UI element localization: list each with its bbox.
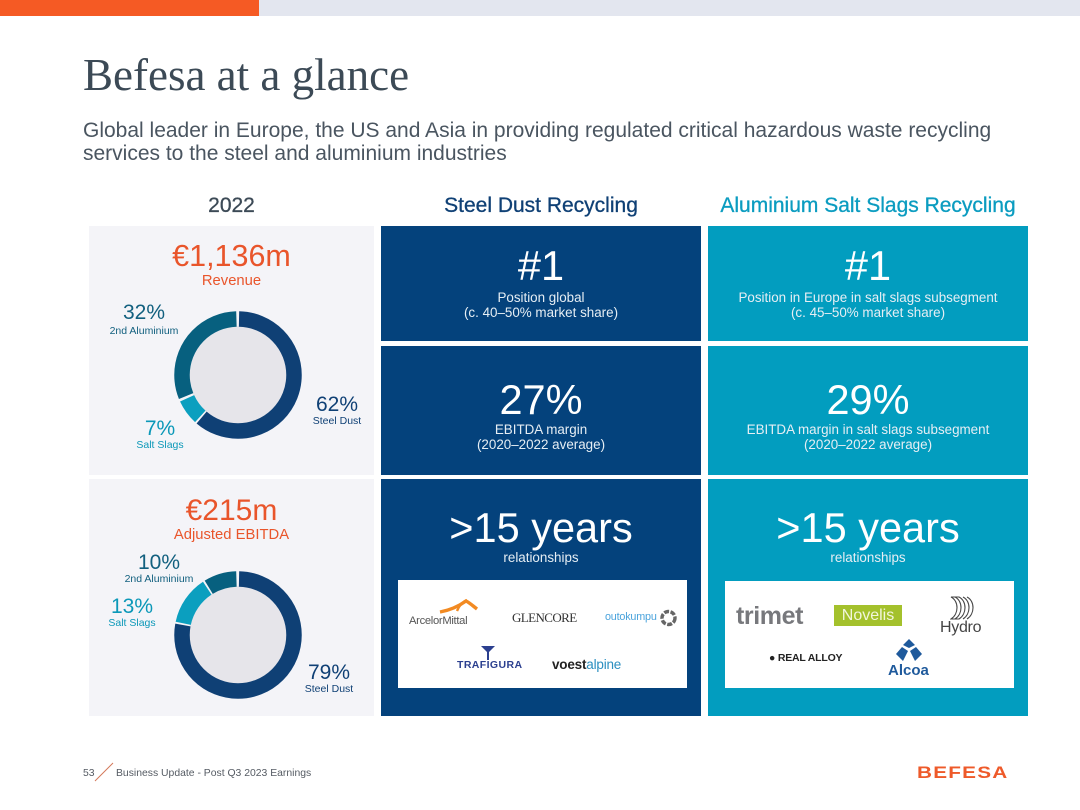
logo: Glencore: GLENCORE [512,610,577,625]
10% 2nd aluminium [125,551,193,585]
subtitle: services to the steel and aluminium industries [83,142,507,164]
panel: adjusted EBITDA [89,479,374,716]
logo: Outokumpu [605,610,677,626]
aluminium margin text: (2020–2022 average) [804,436,932,452]
EBITDA donut chart [174,571,302,699]
32% 2nd aluminium: 32% [123,301,165,324]
steel position text: Position global [497,290,585,305]
62% steel dust [313,393,362,427]
logo: Trimet: trimet [736,602,803,630]
panel: revenue [89,226,374,475]
steel years: >15 years [449,504,633,551]
62% steel dust: 62% [316,393,358,416]
logo: Novelis: Novelis [842,607,894,624]
footer text: Business Update - Post Q3 2023 Earnings [116,768,311,779]
top bar [0,0,1080,16]
logo: Outokumpu: outokumpu [605,611,657,623]
13% salt slags: 13% [111,595,153,618]
panel: aluminium position [708,226,1028,341]
aluminium margin text [747,422,990,452]
7% salt slags: Salt Slags [136,439,184,451]
62% steel dust: Steel Dust [313,415,361,427]
steel margin text: EBITDA margin [495,422,587,437]
footer page number: 53 [83,768,95,779]
steel margin text [477,422,605,452]
panel: steel margin [381,346,701,475]
steel margin text: (2020–2022 average) [477,436,605,452]
32% 2nd aluminium [110,301,178,337]
revenue value: €1,136m [172,239,291,273]
logo: ArcelorMittal: ArcelorMittal [409,615,467,627]
logo: Hydro [940,596,981,636]
13% salt slags [108,595,156,629]
79% steel dust [305,661,354,695]
logo: Alcoa: Alcoa [888,662,929,679]
logo: ArcelorMittal [409,598,478,627]
79% steel dust: Steel Dust [305,683,353,695]
revenue donut chart [174,311,302,439]
10% 2nd aluminium: 10% [138,551,180,574]
logo: Befesa: BEFESA [917,763,1008,782]
panel: aluminium margin [708,346,1028,475]
steel position text: (c. 40–50% market share) [464,304,618,320]
logo: Real Alloy: ● REAL ALLOY [769,652,842,664]
logo: Trafigura [457,646,522,671]
logo: Alcoa [888,639,929,679]
footer slash [94,762,114,782]
steel 27%: 27% [499,376,583,423]
7% salt slags: 7% [145,417,175,440]
aluminium margin text: EBITDA margin in salt slags subsegment [747,422,989,437]
79% steel dust: 79% [308,661,350,684]
title: Befesa at a glance [83,50,409,100]
logo: voestalpine: voestalpine [552,657,621,672]
steel relationships text: relationships [503,550,579,565]
revenue label: Revenue [202,273,261,289]
logo: Novelis [834,605,902,626]
aluminium #1: #1 [845,242,891,289]
13% salt slags: Salt Slags [108,617,156,629]
7% salt slags [136,417,184,451]
panel: steel relationships [381,479,701,716]
panel: steel position [381,226,701,341]
steel customer logos [398,580,687,688]
32% 2nd aluminium: 2nd Aluminium [110,325,178,337]
EBITDA label: Adjusted EBITDA [174,527,289,543]
logo: Hydro: Hydro [940,619,981,636]
steel position text [464,290,618,320]
aluminium position text [738,290,998,320]
column heading: aluminium: Aluminium Salt Slags Recycling [720,194,1016,217]
subtitle [83,119,991,164]
aluminium customer logos [725,581,1014,688]
aluminium position text: (c. 45–50% market share) [791,304,945,320]
logo: Trafigura: TRAFIGURA [457,659,522,671]
steel #1: #1 [518,242,564,289]
10% 2nd aluminium: 2nd Aluminium [125,573,193,585]
subtitle: Global leader in Europe, the US and Asia in providing regulated critical hazardous waste recycling [83,119,991,142]
column heading: 2022: 2022 [208,194,255,217]
column heading: steel dust: Steel Dust Recycling [444,194,638,217]
aluminium years: >15 years [776,504,960,551]
panel: aluminium relationships [708,479,1028,716]
EBITDA value: €215m [186,494,277,527]
aluminium relationships text: relationships [830,550,906,565]
aluminium 29%: 29% [826,376,910,423]
aluminium position text: Position in Europe in salt slags subsegment [738,290,998,305]
